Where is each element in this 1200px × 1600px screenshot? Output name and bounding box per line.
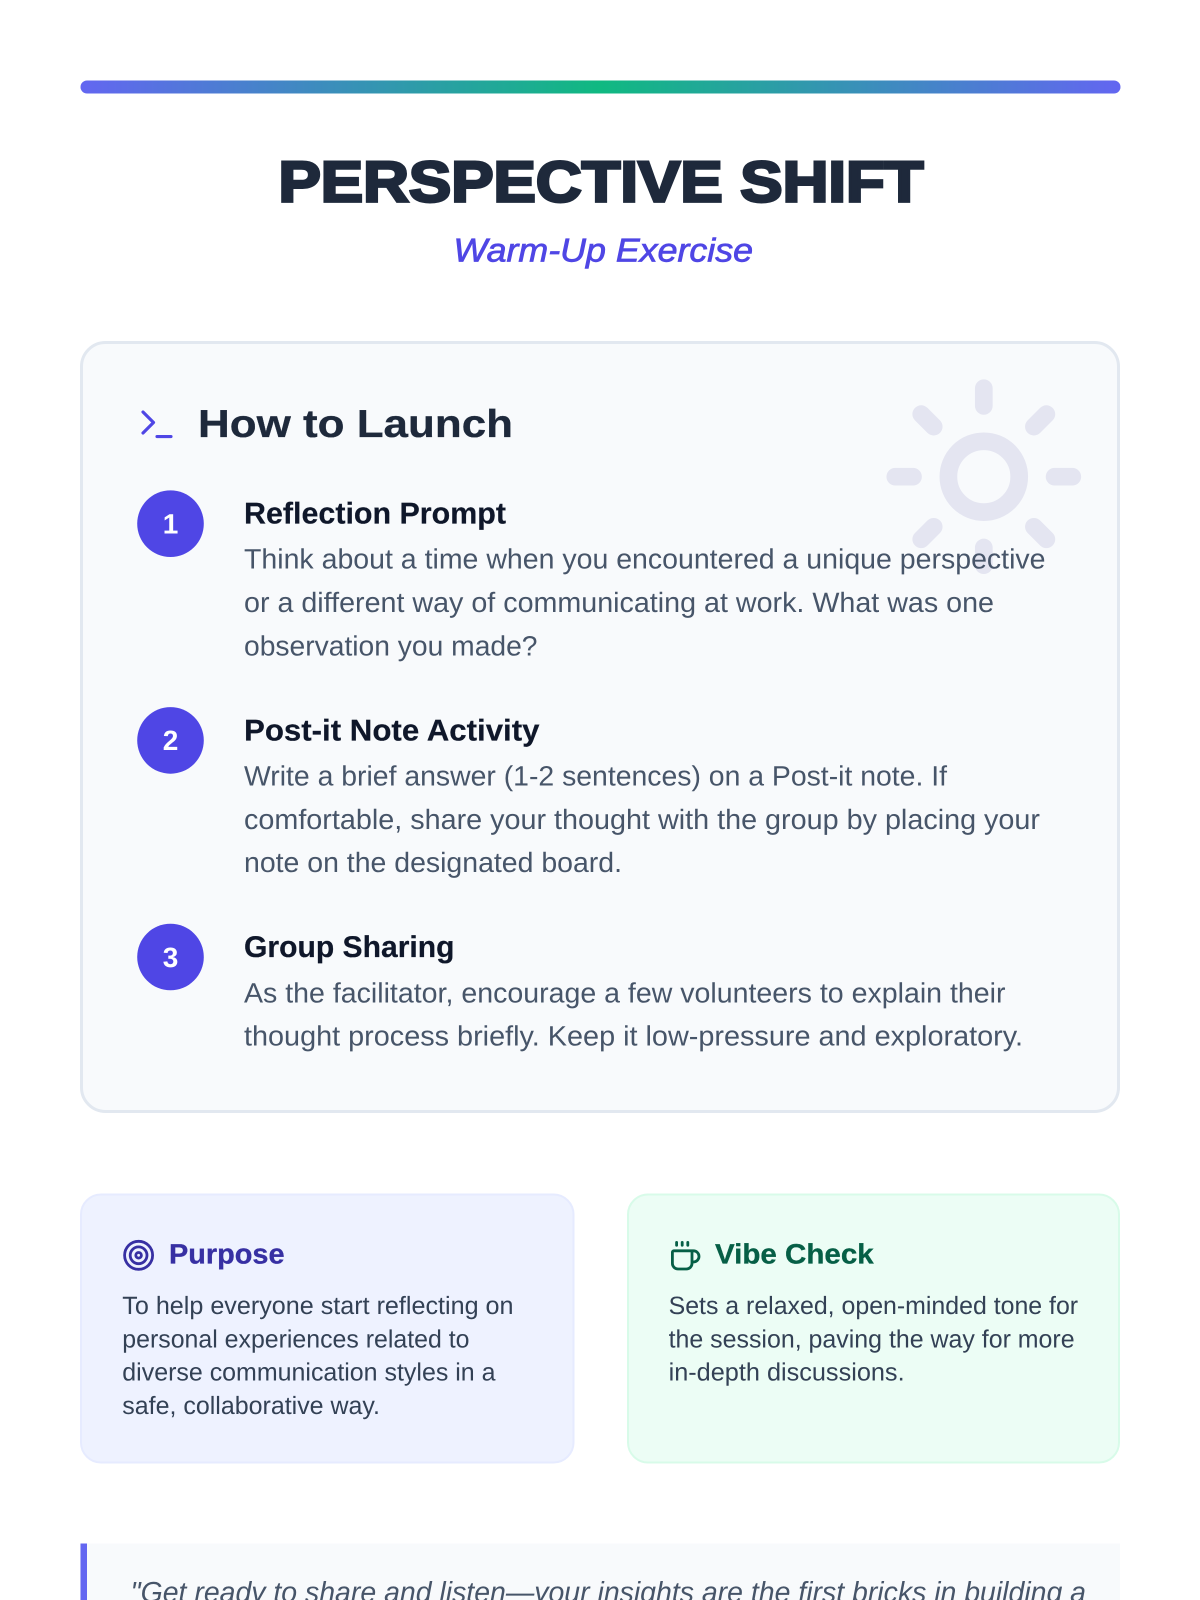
purpose text: diverse communication styles in a [122,1359,496,1387]
purpose text: To help everyone start reflecting on [122,1292,514,1320]
step 1 description: Think about a time when you encountered a unique perspective [244,544,1046,575]
vibe check text: Sets a relaxed, open-minded tone for [669,1292,1078,1320]
step 1 number badge: 1 [163,508,178,540]
panel: purpose [81,1194,574,1462]
icon: terminal prompt [143,412,171,437]
step 1 number badge [137,490,204,557]
purpose background [81,1194,574,1462]
step 1 description: or a different way of communicating at work. What was one [244,587,994,618]
panel: how to launch [82,342,1118,1112]
step 1 description: observation you made? [244,630,538,661]
step 3 title: Group Sharing [244,931,454,964]
step 3 description [244,977,1023,1052]
step 3 [137,924,1023,1052]
icon: faint sun watermark [895,388,1072,565]
step 3 description: thought process briefly. Keep it low-pressure and exploratory. [244,1021,1023,1052]
purpose text: safe, collaborative way. [122,1392,380,1420]
step 2 title: Post-it Note Activity [244,714,540,747]
step 2 description [244,761,1040,878]
vibe check text: in-depth discussions. [669,1359,905,1387]
step 3 description: As the facilitator, encourage a few volunteers to explain their [244,977,1006,1008]
quote accent bar [80,1544,87,1600]
purpose heading: Purpose [169,1238,284,1269]
panel heading: How to Launch [198,403,513,446]
step 2 number badge [137,707,204,774]
icon: coffee cup [672,1242,699,1269]
top gradient bar [80,80,1120,94]
quote background [80,1544,1120,1600]
step 3 number badge: 3 [163,942,178,973]
vibe check background [628,1194,1119,1462]
callout: closing quote [80,1544,1120,1600]
vibe check heading: Vibe Check [715,1238,874,1269]
step 2 description: Write a brief answer (1-2 sentences) on a Post-it note. If [244,761,947,792]
step 1 description [244,544,1046,661]
panel: vibe check [628,1194,1119,1462]
step 2 description: comfortable, share your thought with the group by placing your [244,804,1040,835]
title: PERSPECTIVE SHIFT [278,150,924,214]
subtitle: Warm-Up Exercise [454,232,753,268]
step 1 title: Reflection Prompt [244,498,506,531]
step 2 [137,707,1040,878]
vibe check text: the session, paving the way for more [669,1325,1075,1353]
step 2 description: note on the designated board. [244,847,622,878]
panel background [82,342,1118,1112]
vibe check text [669,1292,1078,1387]
purpose text [122,1292,514,1420]
icon: target [125,1241,153,1269]
step 2 number badge: 2 [163,725,178,756]
purpose text: personal experiences related to [122,1325,470,1353]
step 1 [137,490,1045,661]
step 3 number badge [137,924,204,990]
